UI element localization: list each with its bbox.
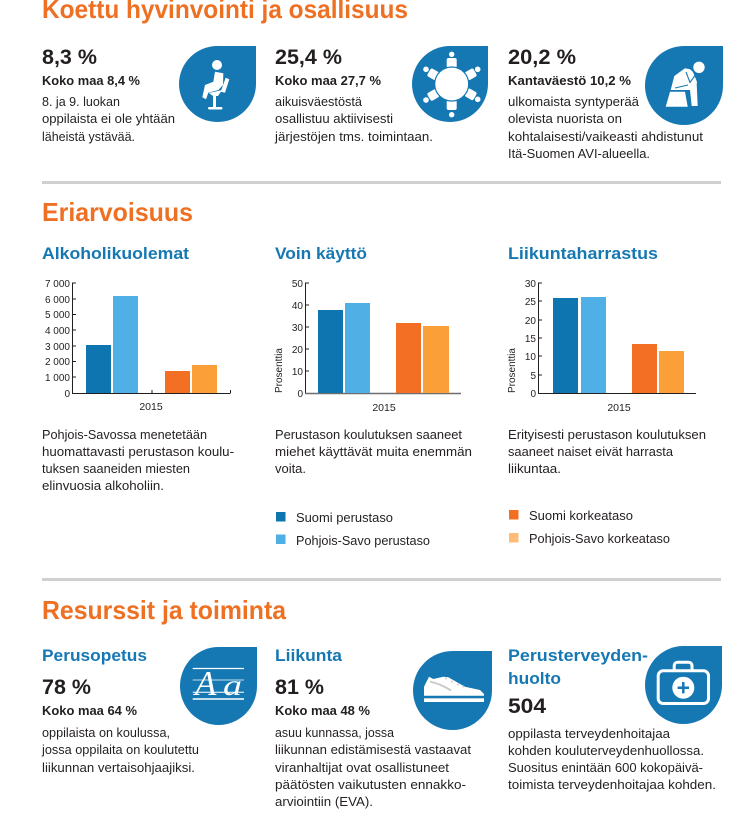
- description: Erityisesti perustason koulutuksen: [508, 427, 706, 442]
- description: läheistä ystävää.: [42, 129, 135, 144]
- description: olevista nuorista on: [508, 111, 622, 126]
- comparison: Kantaväestö 10,2 %: [508, 74, 631, 88]
- subheading: Voin käyttö: [275, 244, 367, 263]
- description: jossa oppilaita on koulutettu: [41, 742, 199, 757]
- description: arviointiin (EVA).: [275, 794, 373, 809]
- bar chart: physical activity: [507, 279, 696, 414]
- description: kohtalaisesti/vaikeasti ahdistunut: [508, 129, 703, 144]
- subheading: Alkoholikuolemat: [42, 244, 189, 263]
- bar chart: physical activity: 20: [525, 316, 536, 327]
- divider: [42, 578, 721, 581]
- panel: Perusopetus: [41, 646, 199, 775]
- description: miehet käyttävät muita enemmän: [275, 444, 472, 459]
- description: saaneet naiset eivät harrasta: [508, 444, 674, 459]
- panel: Perusterveydenhuolto: [508, 646, 716, 792]
- icon: letters Aa: a: [223, 669, 242, 702]
- bar chart: alcohol deaths: 0: [64, 389, 70, 400]
- bar chart: physical activity: 0: [530, 389, 536, 400]
- subheading: Liikunta: [275, 646, 343, 665]
- subheading: Perusterveyden-: [508, 646, 648, 665]
- legend: korkeataso: Suomi korkeataso: [529, 508, 633, 523]
- description: Suositus enintään 600 kokopäivä-: [508, 760, 703, 775]
- legend: perustaso: [276, 510, 430, 548]
- panel: Liikunta: [275, 646, 471, 809]
- figure: 8,3 %: 8,3 %: [42, 46, 97, 69]
- icon: distressed person: [645, 46, 723, 125]
- figure: 78 %: 78 %: [42, 676, 91, 699]
- bar chart: butter use: 40: [292, 301, 303, 312]
- national comparison: Koko maa 8,4 %: [42, 74, 140, 88]
- description: aikuisväestöstä: [275, 94, 363, 109]
- legend: perustaso: Suomi perustaso: [296, 510, 393, 525]
- description: Itä-Suomen AVI-alueella.: [508, 146, 650, 161]
- description: liikuntaa.: [508, 461, 561, 476]
- bar chart: alcohol deaths: 1 000: [45, 373, 70, 384]
- bar chart: butter use: [274, 279, 461, 414]
- legend: perustaso: Pohjois-Savo perustaso: [296, 533, 430, 548]
- figure: 504: 504: [508, 695, 546, 718]
- bar chart: physical activity: 25: [525, 297, 536, 308]
- icon: sports shoe: [413, 651, 492, 730]
- bar chart: alcohol deaths: 2 000: [45, 357, 70, 368]
- legend: korkeataso: Pohjois-Savo korkeataso: [529, 531, 670, 546]
- bar chart: butter use: 10: [292, 367, 303, 378]
- bar chart: physical activity: 2015: [607, 402, 631, 414]
- heading: Eriarvoisuus: Eriarvoisuus: [42, 197, 193, 227]
- figure: 20,2 %: 20,2 %: [508, 46, 576, 69]
- bar chart: alcohol deaths: 5 000: [45, 310, 70, 321]
- description: asuu kunnassa, jossa: [275, 725, 395, 740]
- national comparison: Koko maa 64 %: [42, 704, 137, 718]
- description: kohden kouluterveydenhuollossa.: [508, 743, 704, 758]
- bar chart: physical activity: Prosenttia: [507, 348, 518, 393]
- icon: letters Aa: [180, 647, 257, 725]
- figure: 25,4 %: 25,4 %: [275, 46, 342, 69]
- description: oppilaista ei ole yhtään: [42, 111, 175, 126]
- description: päätösten vaikutusten ennakko-: [275, 777, 466, 792]
- subheading: Liikuntaharrastus: [508, 244, 658, 263]
- bar chart: physical activity: 30: [525, 279, 536, 290]
- description: elinvuosia alkoholiin.: [42, 478, 164, 493]
- legend: korkeataso: [509, 508, 670, 546]
- panel: järjestötoiminta statistic: [274, 46, 433, 144]
- icon: meeting table: [412, 46, 488, 122]
- description: järjestöjen tms. toimintaan.: [274, 129, 433, 144]
- panel: Alkoholikuolemat: [42, 244, 234, 493]
- description: viranhaltijat ovat osallistuneet: [275, 760, 449, 775]
- description: ulkomaista syntyperää: [508, 94, 640, 109]
- bar chart: butter use: 0: [297, 389, 303, 400]
- bar chart: alcohol deaths: 4 000: [45, 326, 70, 337]
- bar chart: physical activity: 15: [525, 334, 536, 345]
- figure: 81 %: 81 %: [275, 676, 324, 699]
- panel: ystävä statistic: [42, 46, 175, 144]
- bar chart: butter use: 30: [292, 323, 303, 334]
- bar chart: physical activity: 5: [530, 371, 536, 382]
- bar chart: butter use: 2015: [372, 402, 396, 414]
- panel: Voin käyttö: [274, 244, 472, 476]
- national comparison: Koko maa 27,7 %: [275, 74, 381, 88]
- description: oppilaista on koulussa,: [42, 725, 170, 740]
- bar chart: butter use: Prosenttia: [274, 348, 285, 393]
- national comparison: Koko maa 48 %: [275, 704, 370, 718]
- panel: Liikuntaharrastus: [507, 244, 706, 476]
- description: tuksen saaneiden miesten: [42, 461, 190, 476]
- bar chart: alcohol deaths: 7 000: [45, 279, 70, 290]
- description: voita.: [275, 461, 306, 476]
- subheading: huolto: [508, 669, 561, 688]
- bar chart: butter use: 50: [292, 279, 303, 290]
- heading: Resurssit ja toiminta: Resurssit ja toiminta: [42, 595, 287, 625]
- bar chart: alcohol deaths: 6 000: [45, 295, 70, 306]
- description: toimista terveydenhoitajaa kohden.: [508, 777, 716, 792]
- description: liikunnan edistämisestä vastaavat: [275, 742, 471, 757]
- description: liikunnan vertaisohjaajiksi.: [42, 760, 195, 775]
- icon: letters Aa: A: [193, 664, 217, 703]
- bar chart: physical activity: 10: [525, 352, 536, 363]
- description: Pohjois-Savossa menetetään: [42, 427, 207, 442]
- description: osallistuu aktiivisesti: [275, 111, 393, 126]
- bar chart: alcohol deaths: [45, 279, 230, 413]
- icon: seated person: [179, 46, 256, 122]
- icon: first aid kit: [645, 646, 722, 724]
- description: oppilasta terveydenhoitajaa: [508, 726, 671, 741]
- bar chart: alcohol deaths: 2015: [139, 401, 163, 413]
- description: huomattavasti perustason koulu-: [42, 444, 234, 459]
- subheading: Perusopetus: [42, 646, 147, 665]
- bar chart: alcohol deaths: 3 000: [45, 342, 70, 353]
- description: Perustason koulutuksen saaneet: [275, 427, 462, 442]
- bar chart: butter use: 20: [292, 345, 303, 356]
- divider: [42, 181, 721, 184]
- description: 8. ja 9. luokan: [42, 94, 120, 109]
- panel: ahdistus statistic: [508, 46, 703, 161]
